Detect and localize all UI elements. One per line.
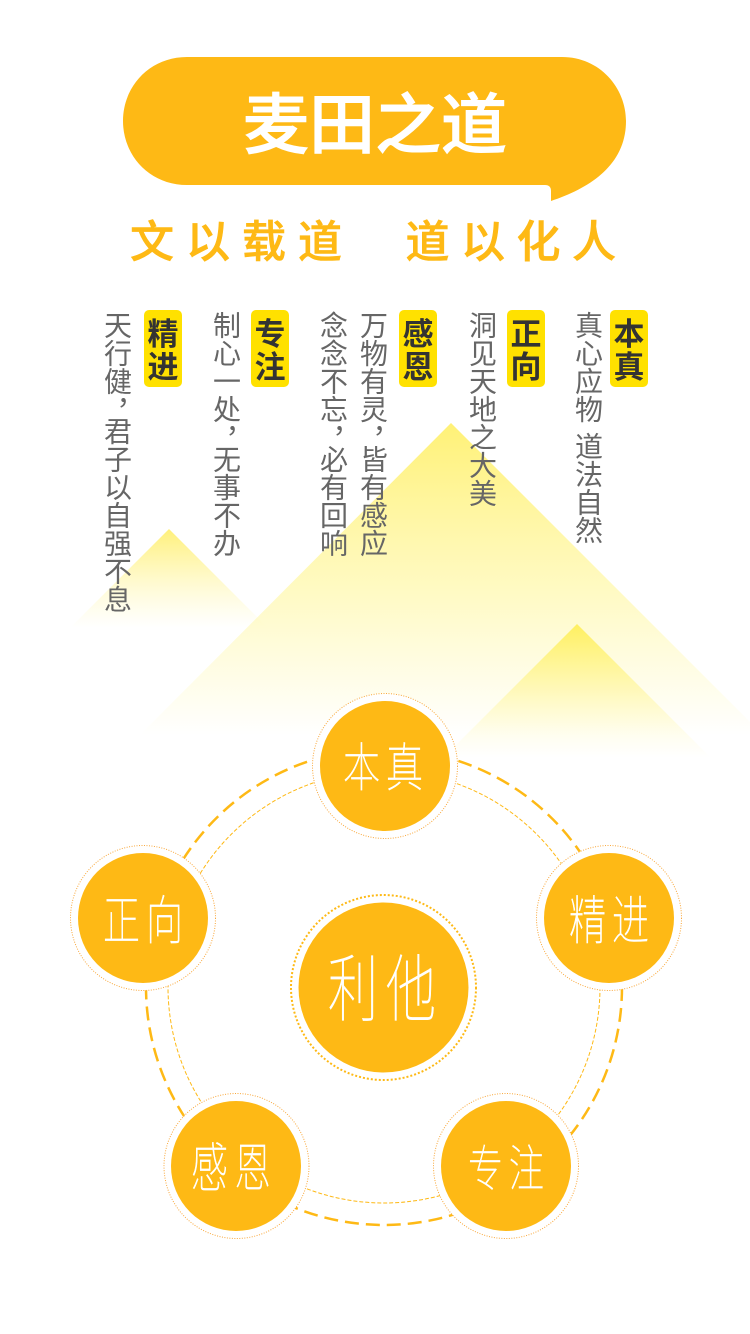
column: 感恩: [315, 310, 437, 557]
badge: 专注: 专注: [254, 317, 286, 385]
badge: 本真: 本真: [614, 317, 644, 385]
inner dashed ring: [168, 771, 600, 1203]
text: 天行健，君子以自强不息: 天行健 ，君子以自强不息: [99, 311, 132, 613]
mountain: small right peak: [443, 624, 711, 758]
column: 专注: [208, 310, 289, 557]
column: 本真: [572, 310, 648, 544]
text: 真心应物 道法自然: 真心应物 道法自然: [572, 311, 603, 544]
node: 精进: 精进: [569, 892, 655, 951]
column: 精进: [99, 310, 182, 613]
outer dashed ring: [146, 749, 622, 1225]
node: 本真: 本真: [343, 739, 429, 798]
centre node: 利他: 利他: [328, 950, 444, 1031]
badge: 精进: 精进: [148, 317, 178, 385]
badge: 感恩: 感恩: [402, 317, 434, 385]
node: 感恩: 感恩: [191, 1139, 277, 1198]
column: 正向: [466, 310, 545, 507]
badge: 正向: 正向: [510, 317, 542, 385]
subtitle: 文以载道 道以化人: [130, 218, 627, 267]
node: 正向: 正向: [103, 892, 189, 951]
text: 念念不忘，必有回响: 念念不忘 ，必有回响: [315, 311, 348, 557]
node: 感恩: [164, 1094, 309, 1238]
title: 麦田之道: [243, 88, 507, 162]
mountain: large centre peak: [140, 423, 750, 735]
text: 万物有灵，皆有感应: 万物有灵 ，皆有感应: [355, 311, 388, 557]
node: 精进: [536, 846, 682, 990]
text: 洞见天地之大美: 洞见天地之大美: [466, 311, 497, 507]
mountain: small left peak: [70, 529, 268, 628]
title speech bubble: [123, 57, 626, 201]
centre node: 利他: [291, 895, 476, 1080]
node: 专注: [434, 1094, 578, 1238]
node: 本真: [312, 694, 458, 838]
node: 专注: 专注: [468, 1142, 550, 1198]
text: 制心一处，无事不办: 制心一处 ，无事不办: [208, 311, 241, 557]
node: 正向: [70, 846, 216, 990]
